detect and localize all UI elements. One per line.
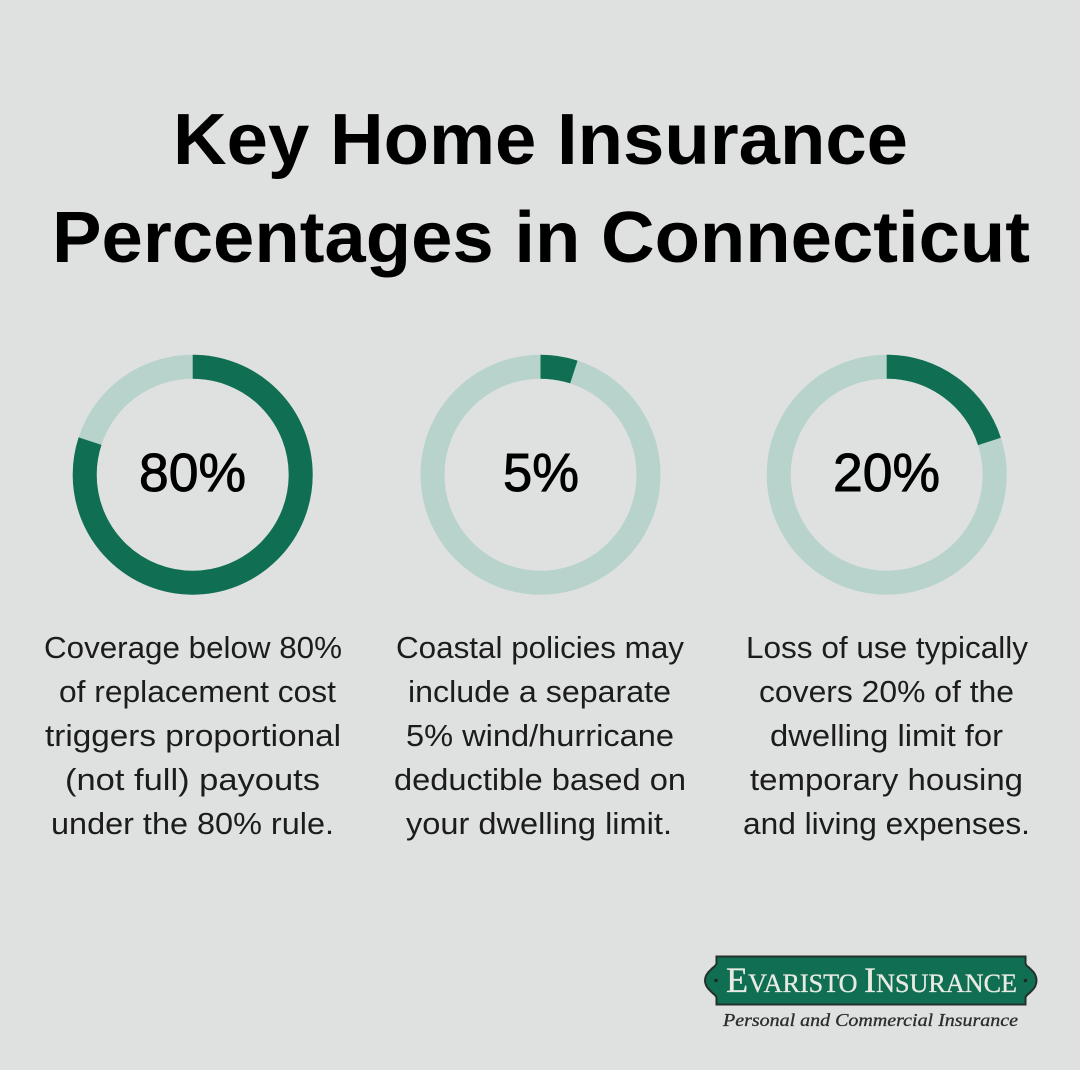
title: Percentages in Connecticut — [52, 198, 1030, 278]
logo name: EVARISTO INSURANCE — [726, 960, 1017, 1000]
title — [52, 100, 1030, 278]
text: wind deductible description: your dwelling limit. — [406, 806, 672, 841]
text: loss of use description: dwelling limit for — [770, 718, 1003, 753]
donut chart: 20% — [779, 367, 995, 583]
donut chart: 80% — [85, 367, 301, 583]
text: wind deductible description — [394, 630, 686, 841]
donut chart: 80%: 80% — [139, 443, 246, 503]
logo tagline: Personal and Commercial Insurance — [722, 1010, 1018, 1030]
text: loss of use description — [743, 630, 1030, 841]
text: loss of use description: temporary housing — [750, 762, 1023, 797]
logo plaque — [705, 956, 1036, 1004]
text: 80% rule description: of replacement cost — [59, 674, 336, 709]
title: Key Home Insurance — [173, 100, 908, 180]
text: 80% rule description — [44, 630, 342, 841]
donut chart: 20%: 20% — [833, 443, 940, 503]
text: 80% rule description: Coverage below 80% — [44, 630, 342, 665]
panel: 20% statistic — [743, 367, 1030, 841]
panel: 80% statistic — [44, 367, 342, 841]
text: 80% rule description: under the 80% rule. — [51, 806, 334, 841]
text: 80% rule description: triggers proportional — [45, 718, 341, 753]
text: wind deductible description: deductible based on — [394, 762, 686, 797]
donut chart: 5%: 5% — [503, 443, 579, 503]
text: wind deductible description: Coastal policies may — [396, 630, 684, 665]
text: loss of use description: and living expenses. — [743, 806, 1030, 841]
text: loss of use description: covers 20% of the — [759, 674, 1014, 709]
logo: Evaristo Insurance — [705, 956, 1036, 1030]
text: 80% rule description: (not full) payouts — [65, 762, 320, 797]
text: wind deductible description: 5% wind/hurricane — [406, 718, 674, 753]
donut chart: 5% — [432, 367, 648, 583]
panel: 5% statistic — [394, 367, 686, 841]
text: loss of use description: Loss of use typically — [746, 630, 1028, 665]
text: wind deductible description: include a separate — [408, 674, 671, 709]
